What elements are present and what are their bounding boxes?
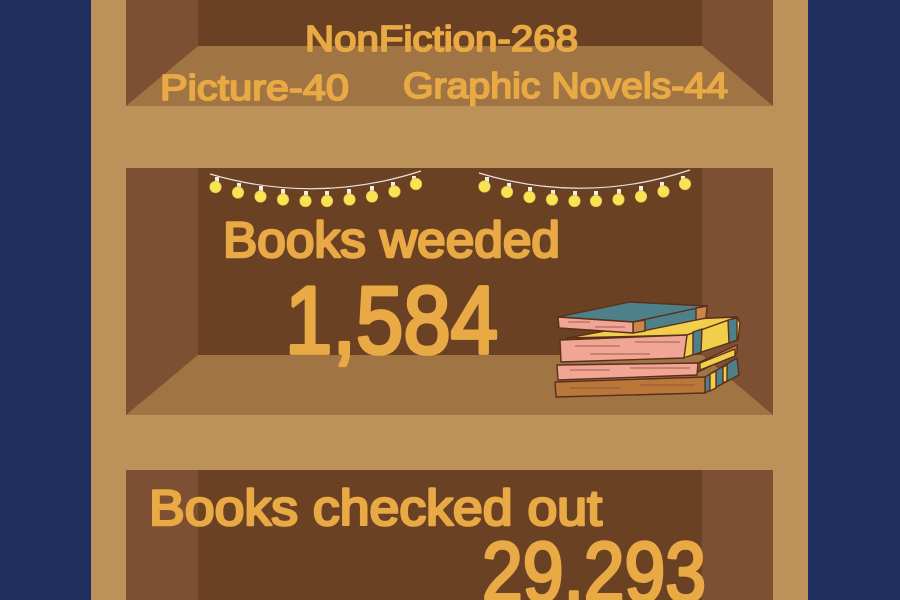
icon: right string lights bbox=[479, 170, 691, 207]
number: books weeded: 1,584 bbox=[285, 267, 498, 374]
bookshelf frame bbox=[91, 0, 808, 600]
icon: stack of books bbox=[555, 302, 740, 397]
second book bbox=[560, 317, 740, 362]
text: nonfiction count: NonFiction-268 bbox=[305, 18, 578, 59]
top book bbox=[558, 302, 707, 333]
bottom book bbox=[555, 358, 739, 397]
third book bbox=[557, 345, 737, 380]
heading: books checked out: Books checked out bbox=[149, 480, 602, 536]
panel: top shelf compartment bbox=[126, 0, 773, 106]
icon: left string lights bbox=[210, 171, 422, 207]
panel: middle shelf compartment bbox=[126, 168, 773, 415]
page lines bbox=[568, 322, 695, 388]
text: picture book count: Picture-40 bbox=[160, 67, 349, 108]
text: graphic novels count: Graphic Novels-44 bbox=[403, 65, 728, 106]
panel: bottom shelf compartment bbox=[126, 470, 773, 600]
heading: books weeded: Books weeded bbox=[223, 212, 560, 268]
